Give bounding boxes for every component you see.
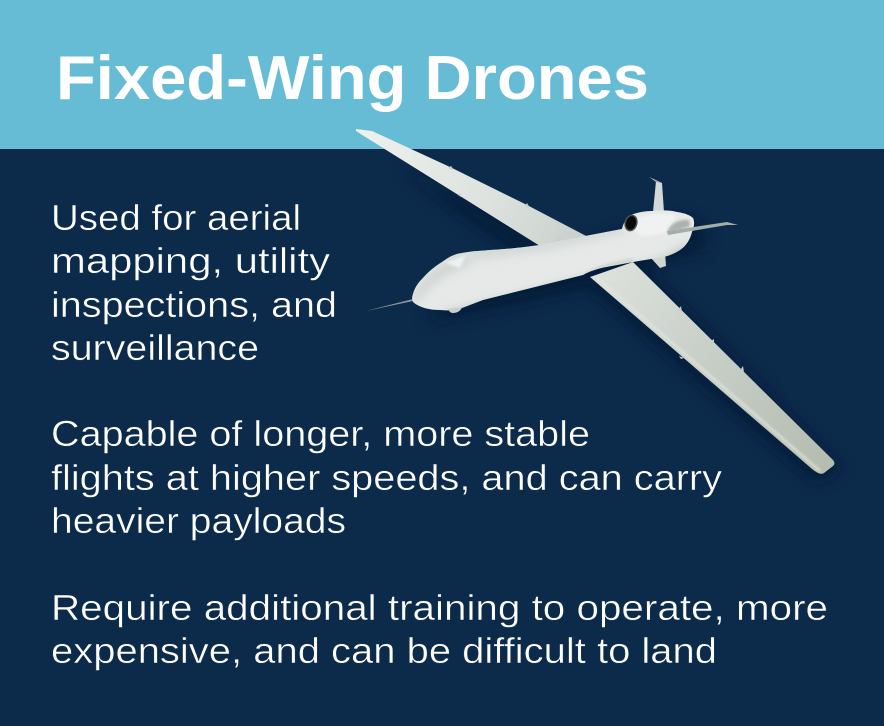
- fuselage: [412, 210, 696, 320]
- header band: [0, 0, 884, 149]
- landing gear: [448, 307, 462, 313]
- text block: uses: mapping, utility: [51, 240, 330, 281]
- nose probe: [366, 299, 413, 311]
- left wing: [356, 129, 590, 248]
- exhaust recess: [667, 220, 690, 232]
- upper tail fin: [649, 177, 664, 212]
- text block: uses: surveillance: [51, 327, 259, 368]
- text block: capabilities: heavier payloads: [51, 500, 346, 541]
- engine intake: [623, 213, 639, 233]
- right wing: [590, 262, 834, 474]
- text block: uses: inspections, and: [51, 284, 337, 325]
- text block: drawbacks: [51, 587, 828, 671]
- text block: drawbacks: expensive, and can be difficult to land: [51, 630, 717, 671]
- text block: capabilities: [51, 413, 722, 541]
- text block: capabilities: flights at higher speeds, and can carry: [51, 457, 722, 498]
- wing pods: [448, 166, 744, 372]
- title: Fixed-Wing Drones: [56, 44, 649, 113]
- horizontal stabiliser: [667, 222, 738, 235]
- drone illustration: [356, 129, 842, 482]
- text block: capabilities: Capable of longer, more stable: [51, 413, 590, 454]
- lower tail fin: [651, 252, 666, 268]
- text block: uses: Used for aerial: [51, 197, 301, 238]
- text block: uses: [51, 197, 337, 368]
- engine housing: [633, 214, 676, 236]
- body shading: [412, 252, 470, 302]
- drone shadow: [400, 165, 842, 482]
- text block: drawbacks: Require additional training to operate, more: [51, 587, 828, 628]
